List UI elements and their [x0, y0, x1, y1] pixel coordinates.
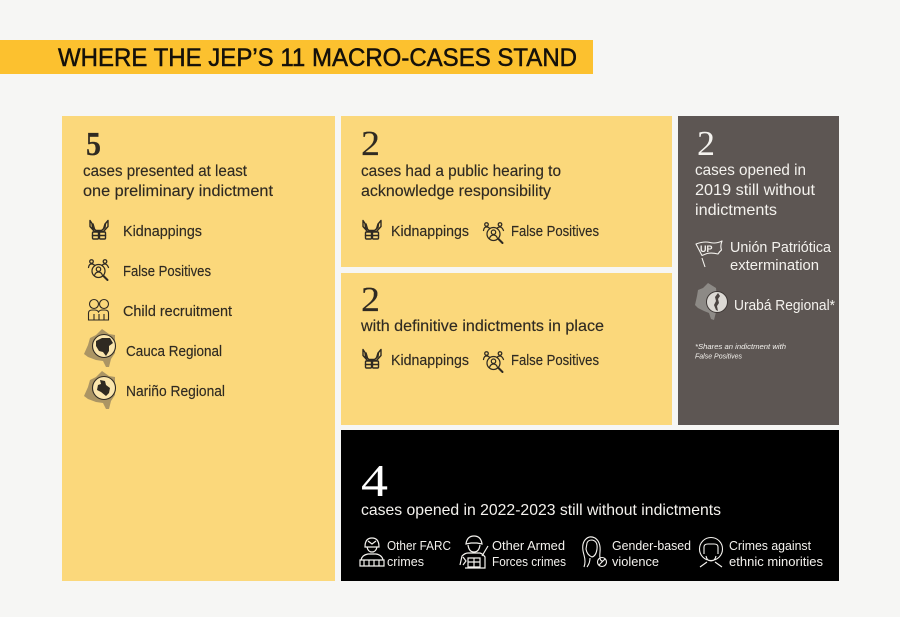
panel description: acknowledge responsibility: [361, 183, 551, 200]
item: Child recruitment: [88, 300, 232, 320]
number 5: 5: [86, 126, 101, 163]
item: False Positives: [484, 352, 599, 372]
panel description: [361, 163, 561, 200]
panel description: with definitive indictments in place: [360, 318, 604, 335]
item: Kidnappings: Kidnappings: [391, 224, 469, 240]
number 2: 2: [697, 124, 715, 163]
item: Other FARC crimes: [360, 538, 451, 569]
item: Other Armed Forces crimes: Forces crimes: [492, 554, 566, 569]
panel: definitive indictments: [341, 273, 672, 425]
item: Other FARC crimes: Other FARC: [387, 538, 451, 553]
number 2: 2: [361, 280, 380, 319]
item: Unión Patriótica extermination: extermination: [730, 258, 819, 274]
item: Urabá Regional: [695, 283, 835, 320]
item: Kidnappings: [363, 220, 469, 240]
number 2: 2: [361, 124, 380, 163]
panel: public hearing: [341, 116, 672, 267]
item: Urabá Regional: Urabá Regional*: [734, 298, 835, 314]
panel description: cases opened in: [695, 162, 806, 179]
item: Cauca Regional: [84, 329, 222, 367]
panel description: one preliminary indictment: [83, 183, 274, 200]
item: Kidnappings: Kidnappings: [391, 353, 469, 369]
panel: five cases with a preliminary indictment: [62, 116, 335, 581]
item: Crimes against ethnic minorities: ethnic minorities: [729, 554, 823, 569]
item: Gender-based violence: violence: [612, 554, 659, 569]
item: Child recruitment: Child recruitment: [123, 304, 232, 320]
panel description: cases opened in 2022-2023 still without indictments: [361, 502, 721, 519]
item: Other FARC crimes: crimes: [387, 554, 424, 569]
item: False Positives: False Positives: [511, 224, 599, 240]
panel description: [83, 163, 274, 200]
item: Unión Patriótica extermination: UP: [700, 244, 713, 254]
item: False Positives: False Positives: [123, 264, 211, 280]
panel description: cases had a public hearing to: [361, 163, 561, 180]
item: Other Armed Forces crimes: Other Armed: [492, 538, 565, 553]
panel description: [695, 162, 816, 219]
footnote: False Positives: [695, 352, 742, 360]
item: Unión Patriótica extermination: Unión Patriótica: [730, 240, 832, 256]
item: False Positives: [484, 223, 599, 243]
item: Kidnappings: Kidnappings: [123, 224, 202, 240]
panel description: indictments: [695, 202, 777, 219]
item: Unión Patriótica extermination: [696, 240, 832, 274]
item: Kidnappings: [363, 350, 469, 369]
item: Gender-based violence: [583, 537, 691, 569]
footnote: [695, 342, 786, 360]
item: Nariño Regional: [84, 371, 225, 409]
panel: 2022-2023 cases without indictments: [341, 430, 839, 581]
item: Cauca Regional: Cauca Regional: [126, 344, 222, 360]
number 4: 4: [361, 455, 388, 506]
item: Kidnappings: [90, 220, 202, 240]
footnote: *Shares an indictment with: [695, 342, 786, 351]
panel description: 2019 still without: [695, 182, 816, 199]
title banner: WHERE THE JEP’S 11 MACRO-CASES STAND: [58, 44, 577, 72]
panel description: cases presented at least: [83, 163, 248, 180]
item: False Positives: [88, 260, 211, 280]
panel: 2019 cases without indictments: [678, 116, 839, 425]
item: Crimes against ethnic minorities: Crimes against: [729, 538, 811, 553]
item: Gender-based violence: Gender-based: [612, 538, 691, 553]
item: Other Armed Forces crimes: [460, 536, 566, 569]
item: Crimes against ethnic minorities: [700, 538, 823, 569]
item: False Positives: False Positives: [511, 353, 599, 369]
item: Nariño Regional: Nariño Regional: [126, 384, 225, 400]
